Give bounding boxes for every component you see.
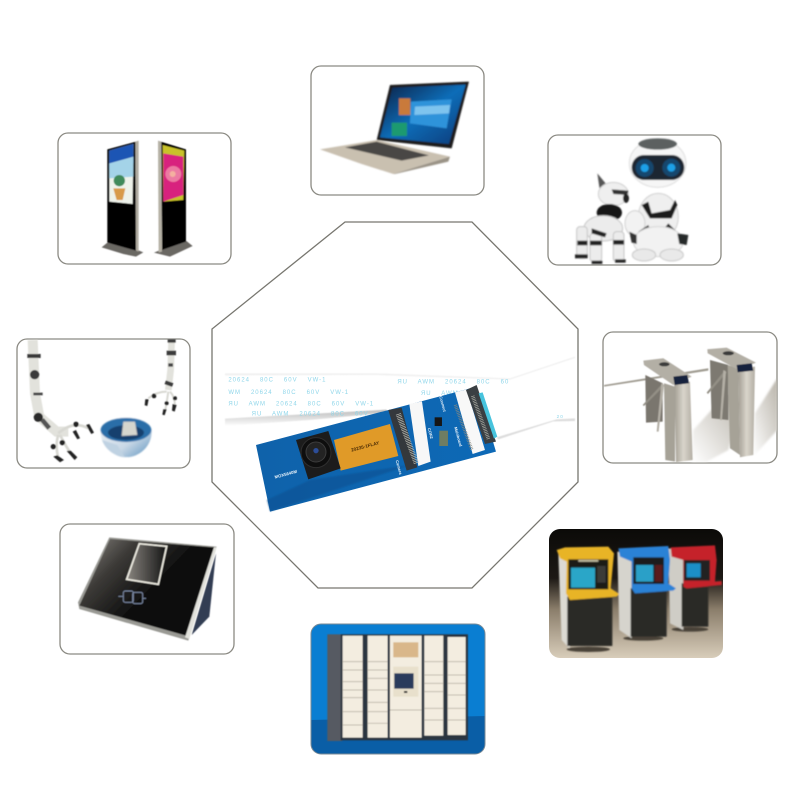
ribbon cable	[225, 357, 575, 439]
ribbon markings: WM 20624 80C 60V VW-1	[228, 390, 349, 396]
ribbon connectors	[388, 385, 497, 471]
panel: self-service terminals	[549, 529, 723, 658]
panel outline: parcel locker	[311, 624, 485, 754]
panel: digital signage kiosks	[58, 133, 231, 264]
icon: robot dog	[575, 173, 629, 264]
icon: blue terminal	[617, 546, 676, 641]
terminal stand	[192, 553, 216, 635]
face screen frame	[127, 544, 167, 584]
camera lens	[296, 431, 341, 479]
board silkscreen: Connect	[438, 396, 447, 413]
ribbon markings: ЯU AWM	[421, 391, 459, 397]
fingerprint reader	[118, 591, 146, 604]
panel: laptop	[311, 66, 484, 195]
panel: turnstiles	[603, 332, 777, 463]
icon: right kiosk	[154, 141, 193, 257]
icon: humanoid robot	[625, 138, 688, 261]
camera module with ribbon cable	[225, 357, 575, 512]
icon: locker unit	[327, 634, 468, 741]
board silkscreen: Camera	[395, 460, 403, 476]
panel: parcel locker	[311, 624, 485, 754]
blue PCB board	[256, 387, 496, 512]
icon: laptop	[320, 82, 469, 174]
icon: right turnstile	[707, 348, 756, 457]
terminal body	[78, 537, 217, 641]
ribbon markings: ЯU AWM 20624 80C 60	[397, 379, 509, 385]
icon: globe bowl	[101, 418, 152, 457]
icon: yellow terminal	[557, 547, 619, 652]
camera module with ribbon cable: 20235-1FLAY	[351, 440, 381, 453]
icon: left turnstile	[604, 358, 708, 462]
panel: face recognition terminal	[60, 524, 234, 654]
ribbon markings: ЯU AWM 20624 80C 60V	[252, 412, 369, 418]
camera module with ribbon cable: MOX5640M	[274, 469, 298, 480]
board silkscreen	[395, 396, 464, 476]
panel: robotic arms and globe	[17, 339, 190, 468]
ribbon markings	[228, 377, 564, 419]
icon: right robotic arm	[145, 339, 177, 415]
ribbon markings: ЯU AWM 20624 80C 60V VW-1	[228, 401, 374, 407]
panel: robots	[548, 135, 721, 265]
icon: left robotic arm	[27, 340, 94, 462]
icon: red terminal	[668, 545, 722, 632]
panel: central octagon	[212, 222, 578, 588]
icon: left kiosk	[102, 141, 143, 257]
orange flex cable	[334, 424, 398, 471]
floor shadows	[692, 378, 777, 462]
board silkscreen: CON2	[427, 427, 435, 440]
board silkscreen: Mainboard	[453, 426, 464, 448]
ribbon markings: 20	[557, 414, 564, 419]
ribbon markings: 20624 80C 60V VW-1	[228, 377, 326, 383]
